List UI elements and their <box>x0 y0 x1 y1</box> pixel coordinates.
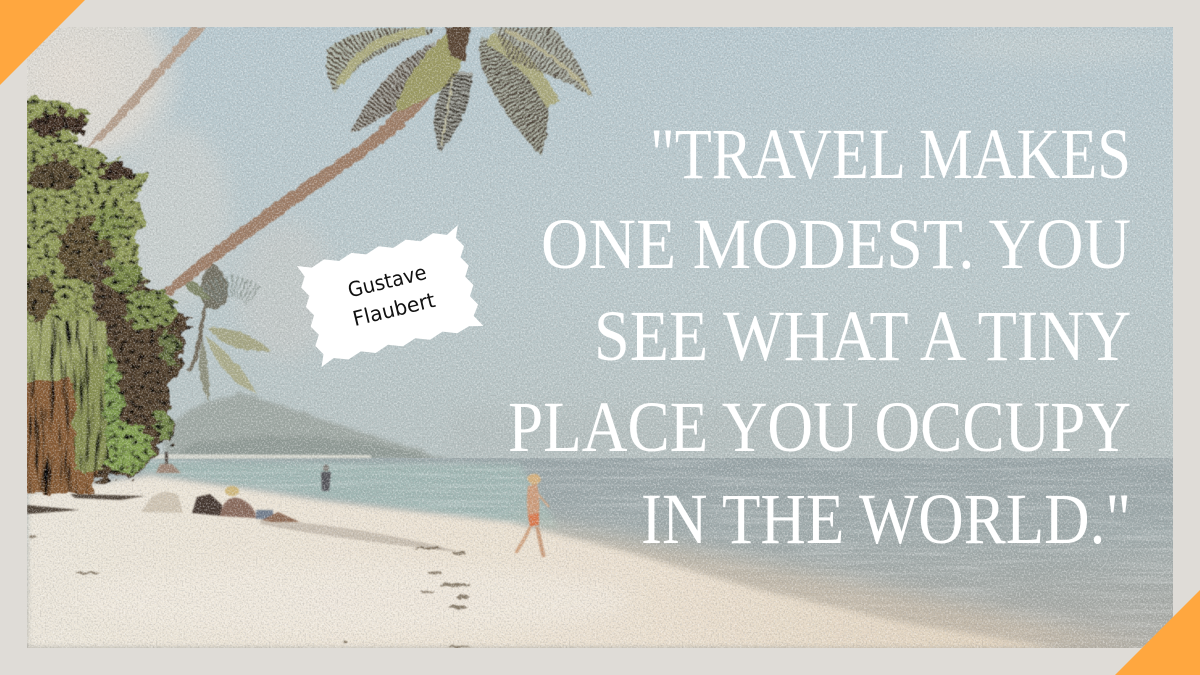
stamp shape <box>296 225 484 367</box>
author name: Flaubert <box>350 288 438 331</box>
palm heart <box>445 27 470 62</box>
quote text: IN THE WORLD." <box>641 479 1131 559</box>
sea <box>27 458 1173 648</box>
sea ripples <box>27 458 1173 648</box>
quote text <box>508 114 1131 559</box>
author name <box>343 260 438 331</box>
sand shading <box>404 579 609 622</box>
hanging palm skirt <box>15 320 105 495</box>
distant headland <box>160 393 448 460</box>
cloud haze <box>27 27 1150 352</box>
shallow water tint <box>140 460 560 530</box>
seaweed debris <box>29 536 470 648</box>
far shore strip <box>150 454 372 459</box>
right dense foliage <box>85 260 188 480</box>
leaning palm trunk back <box>84 27 207 150</box>
person standing in water <box>321 464 331 491</box>
woman walking <box>516 474 549 557</box>
jungle foliage <box>10 100 188 514</box>
beach shadow <box>260 520 460 552</box>
frond: center olive <box>396 34 462 112</box>
small palm <box>180 262 271 402</box>
quote text: ONE MODEST. YOU <box>541 204 1131 284</box>
frond: far left <box>324 27 434 93</box>
corner accent: bottom right <box>1115 590 1200 675</box>
sand <box>27 475 1060 648</box>
frond: right <box>470 30 555 160</box>
upper foliage with fronds <box>27 94 151 324</box>
author stamp <box>296 225 484 367</box>
sky <box>27 27 1173 462</box>
wet sand band <box>520 520 1173 648</box>
frond: hanging <box>432 71 474 152</box>
ground shadow under trees <box>27 494 145 514</box>
author name: Gustave <box>345 260 429 302</box>
quote text: SEE WHAT A TINY <box>594 296 1131 376</box>
person lying with bags <box>192 486 300 522</box>
frond: far right <box>490 25 595 100</box>
quote text: PLACE YOU OCCUPY <box>508 387 1131 467</box>
distant boat post <box>156 452 181 473</box>
corner accent: top left <box>0 0 85 85</box>
frond: left dark <box>350 41 436 133</box>
large palm trunk <box>160 40 462 296</box>
large palm crown <box>320 25 595 160</box>
rock <box>141 492 183 513</box>
